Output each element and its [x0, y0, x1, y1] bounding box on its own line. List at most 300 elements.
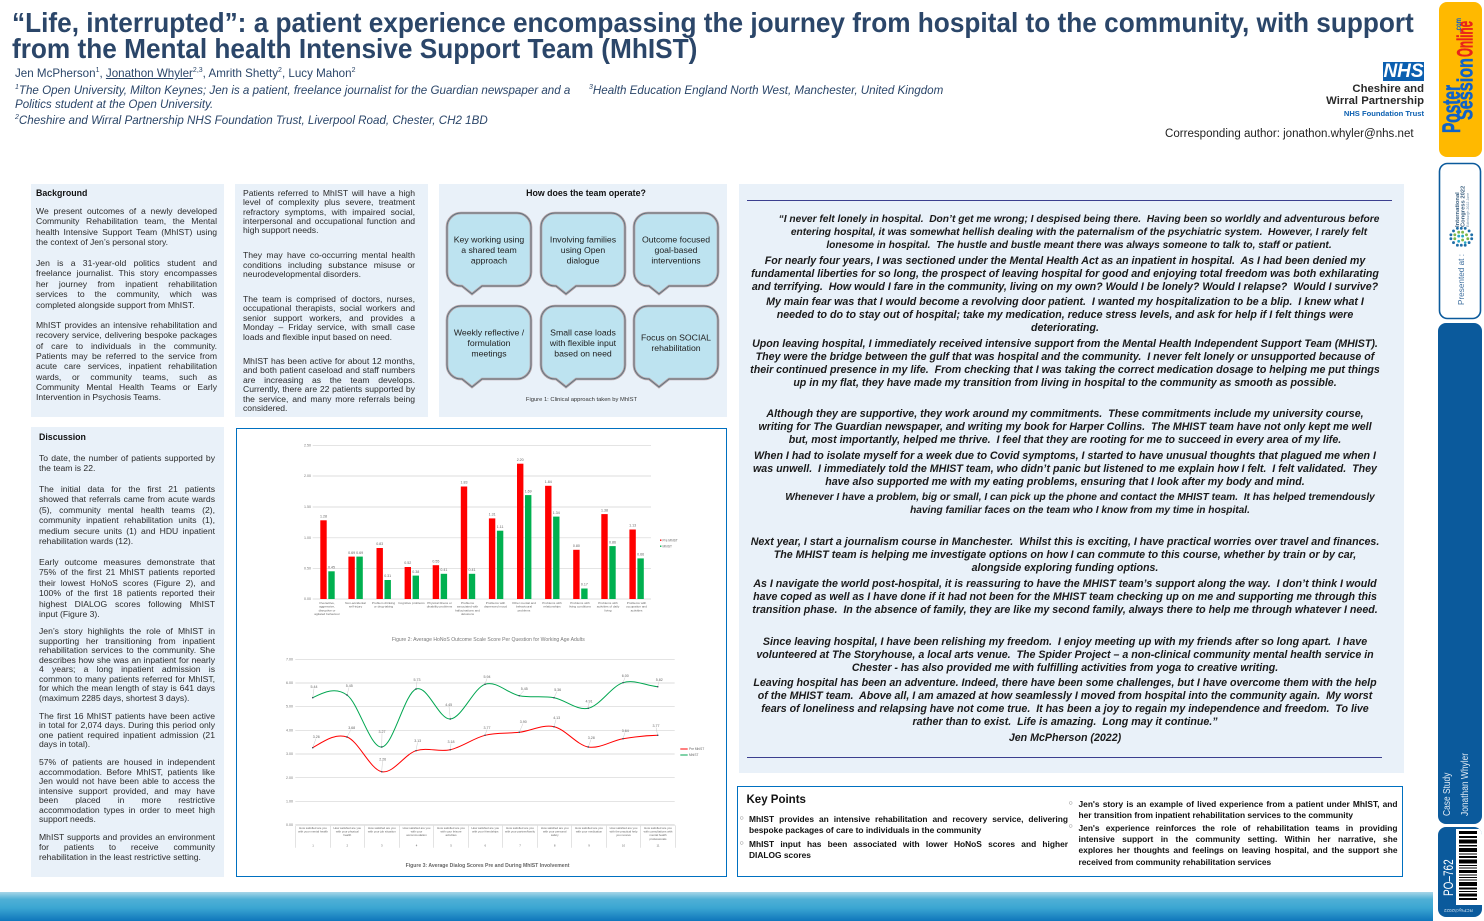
chart: DIALOG line chart: How satisfied are you [333, 826, 362, 830]
chart: HoNoS bar chart: disability problems [427, 605, 453, 609]
discussion text: accommodation types in order to meet high [39, 804, 215, 814]
bubble: weekly reflective: meetings [471, 348, 507, 358]
bubble: key working [447, 213, 531, 294]
referrals text: neurodevelopmental disorders. [243, 269, 361, 279]
discussion text: their lowest HoNoS scores (Figure 2), and [39, 578, 215, 588]
heading: key points: Key Points [746, 794, 806, 806]
quote text: their continued presence in my life. From checking that I was taking the correct medication dosage to helping me put things [750, 364, 1380, 376]
sidebar: presented at: Edinburgh 2022 June [1466, 193, 1470, 227]
chart: HoNoS bar chart: 0.55 [432, 559, 439, 563]
chart: DIALOG line chart: activities [445, 833, 457, 837]
chart: DIALOG line chart: How satisfied are you [437, 826, 465, 830]
chart: DIALOG line chart: 5.45 [521, 687, 528, 691]
discussion text: rehabilitation services to the community. She [39, 645, 215, 655]
discussion text: Early outcome measures demonstrate that [39, 557, 215, 567]
chart: HoNoS bar chart: Physical illness or [427, 601, 452, 605]
chart: DIALOG line chart: 6.00 [286, 681, 293, 685]
discussion text: input (Figure 3). [39, 609, 100, 619]
referrals text: Patients referred to MhIST will have a high [243, 188, 415, 198]
chart: HoNoS bar chart: 0.45 [328, 566, 335, 570]
discussion text: The initial data for the first 21 patients [39, 484, 215, 494]
discussion text: (5), community mental health teams (2), [39, 505, 215, 515]
chart: DIALOG line chart: How satisfied are you [368, 826, 396, 830]
bubble: small case loads [541, 306, 625, 387]
chart: HoNoS bar chart: 0.31 [384, 574, 391, 578]
quote text: Since leaving hospital, I have been relishing my freedom. I enjoy meeting up with my friends after so long apart. I have [763, 636, 1367, 648]
quote text: entering hospital, it was somewhat hellish dealing with the paternalism of the psychiatric system. However, I rarely felt [791, 226, 1367, 238]
chart: DIALOG line chart: How satisfied are you [610, 826, 638, 830]
chart: DIALOG line chart: 5.45 [346, 684, 353, 688]
chart: HoNoS bar chart: 0.17 [581, 583, 588, 587]
panel: charts [236, 428, 727, 877]
chart: HoNoS bar chart: Problem drinking [372, 601, 395, 605]
bubble: social rehabilitation [634, 306, 718, 387]
referrals text: senior support workers, and provides a [243, 313, 415, 323]
referrals text: and both patient caseload and staff numbers [243, 365, 415, 375]
sidebar: poster session online: Session [1452, 58, 1478, 120]
referrals text: They may have co-occurring mental health [243, 250, 415, 260]
chart: DIALOG line chart: 3.90 [520, 720, 527, 724]
chart: DIALOG line chart: 4.13 [553, 716, 560, 720]
bubble: key working: Key working using [454, 234, 524, 244]
key points content: ○ [740, 840, 744, 847]
chart: DIALOG line chart: 4.00 [286, 728, 293, 732]
chart: DIALOG line chart: 2.26 [379, 757, 386, 761]
chart: DIALOG line chart: with consultations with [644, 830, 673, 834]
bubble: key working: a shared team [461, 245, 517, 255]
referrals text: occupational therapists, social workers and [243, 303, 415, 313]
referrals text: interpersonal and occupational function and [243, 216, 415, 226]
bubble: small case loads: with flexible input [549, 338, 617, 348]
discussion text: MhIST supports and provides an environment [39, 832, 215, 842]
discussion text: 100% of the first 18 patients reported their [39, 588, 215, 598]
chart: HoNoS bar chart: 1.69 [525, 489, 532, 493]
discussion text: community inpatient rehabilitation units (1), [39, 515, 215, 525]
quote text: The MHIST team is helping me investigate options on how I can commute to this course, whether by train or by car, [774, 548, 1356, 560]
chart: HoNoS bar chart: Problems with [542, 601, 562, 605]
chart: HoNoS bar chart: 1.28 [320, 514, 327, 518]
referrals text: refractory symptoms, with impaired social, [243, 207, 415, 217]
chart: DIALOG line chart: How satisfied are you [575, 826, 603, 830]
panel: patient quote [739, 184, 1404, 773]
chart: HoNoS bar chart: occupation and [626, 605, 647, 609]
discussion text [39, 453, 215, 862]
panel: referrals [235, 184, 428, 417]
chart: HoNoS bar chart: 0.50 [304, 566, 311, 570]
corresponding author: Corresponding author: jonathon.whyler@nhs.net [1165, 128, 1414, 140]
chart: HoNoS bar chart: 0.66 [637, 553, 644, 557]
chart: HoNoS bar chart: behavioural [516, 605, 532, 609]
discussion text: The first 16 MhIST patients have been active [39, 711, 215, 721]
bubble: small case loads: based on need [554, 348, 612, 358]
chart: DIALOG line chart: 3.13 [414, 739, 421, 743]
key points content: MhIST input has been associated with lower HoNoS scores and higher [749, 839, 1068, 849]
chart: HoNoS bar chart: Overactive, [319, 601, 335, 605]
chart: HoNoS bar chart: 1.84 [545, 480, 552, 484]
chart: DIALOG line chart: 4.45 [445, 703, 452, 707]
chart: HoNoS bar chart: Problems [461, 601, 474, 605]
key points content: explores her thoughts and feelings on leaving hospital, and the support she [1078, 845, 1398, 855]
chart: DIALOG line chart: health [343, 833, 352, 837]
chart: DIALOG line chart: with your job situation [368, 830, 396, 834]
quote text: transition phase. In the absence of family, they are like my second family, always there to help me through whatever I need. [752, 604, 1378, 616]
discussion text: To date, the number of patients supported by [39, 453, 215, 463]
heading: how does the team operate: How does the team operate? [526, 188, 646, 198]
chart: HoNoS bar chart: 0.00 [304, 597, 311, 601]
sidebar: presented at: International [1455, 192, 1461, 227]
chart: HoNoS bar chart: Cognitive problems [398, 601, 425, 605]
quote text: alongside exploring funding options. [972, 562, 1158, 574]
chart: HoNoS bar chart: delusions [461, 612, 474, 616]
discussion text: one patient required inpatient admission (21 [39, 730, 215, 740]
background text [36, 206, 217, 402]
bubble: social rehabilitation: rehabilitation [651, 343, 701, 353]
chart: HoNoS bar chart: 1.34 [553, 511, 560, 515]
chart: DIALOG line chart: 2.00 [286, 776, 293, 780]
discussion text: days in total). [39, 739, 90, 749]
chart: HoNoS bar chart: 2.00 [304, 474, 311, 478]
chart: DIALOG line chart: 3.64 [622, 729, 629, 733]
background text: Community Rehabilitation team, the Mental [36, 216, 217, 226]
key points content: received from community rehabilitation services [1078, 857, 1271, 867]
chart: HoNoS bar chart: hallucinations and [455, 608, 480, 612]
NHS logo: NHS Foundation Trust [1344, 109, 1424, 118]
quote text: As I navigate the world post-hospital, it is reassuring to have the MHIST team’s support along the way. I don’t think I would [753, 578, 1377, 590]
discussion text: 4 years; a long inpatient admission is [39, 664, 215, 674]
background text: wards, or community teams, such as [36, 372, 217, 382]
heading: background: Background [36, 188, 87, 198]
chart: DIALOG line chart: 3.27 [378, 730, 386, 734]
discussion text: 57% of patients are housed in independent [39, 757, 215, 767]
chart: HoNoS bar chart: Problems with [627, 601, 646, 605]
chart: HoNoS bar chart: associated with [457, 605, 478, 609]
bubble: key working: approach [471, 256, 507, 266]
chart: DIALOG line chart: 5.36 [554, 688, 561, 692]
chart: DIALOG line chart: 4 [416, 844, 418, 848]
chart: DIALOG line chart: with your physical [336, 830, 359, 834]
referrals text: Currently, there are 22 patients supported by [243, 384, 415, 394]
bubble: outcome focused: interventions [651, 256, 701, 266]
referrals text: the service, and many more referrals being [243, 394, 415, 404]
quote text: For nearly four years, I was sectioned under the Mental Health Act as an inpatient in hospital. As I had been denied my [765, 254, 1365, 266]
chart: DIALOG line chart: you receive [616, 833, 631, 837]
chart: HoNoS bar chart: 0.86 [609, 540, 616, 544]
key points content: ○ [1068, 823, 1073, 830]
discussion text: accommodation. Before MhIST, patients like [39, 766, 215, 776]
chart: DIALOG line chart: 8 [554, 844, 556, 848]
quote text: but, most importantly, helped me thrive. I feel that they are rooting for me to succeed in every area of my life. [789, 434, 1341, 446]
chart: DIALOG line chart: 5.00 [286, 704, 293, 708]
quote text: have also supported me with my eating problems, ensuring that I look after my body and mind. [825, 476, 1305, 488]
chart: DIALOG line chart: How satisfied are you [471, 826, 500, 830]
discussion text: rehabilitation in the least restrictive setting. [39, 852, 201, 862]
key points content: bespoke packages of care to individuals in the community [749, 825, 981, 835]
referrals text: The team is comprised of doctors, nurses, [243, 294, 415, 304]
chart: HoNoS bar chart: living [604, 608, 612, 612]
referrals text: high support needs. [243, 225, 318, 235]
quote text: of the MHIST team. Above all, I am amazed at how seamlessly I moved from hospital into the community again. My worst [758, 690, 1372, 702]
quote text: was unwell. I immediately told the MHIST team, who didn’t panic but listened to me explain how I felt. I felt validated. They [753, 462, 1377, 474]
panel: key points [737, 786, 1403, 877]
chart: DIALOG line chart: 0.00 [286, 823, 293, 827]
key points content: Jen's story is an example of lived experience from a patient under MhIST, and [1078, 799, 1398, 809]
background text: services to the community, which was [36, 289, 217, 299]
panel: background [31, 184, 224, 417]
background text: Intervention in Psychosis Teams. [36, 392, 161, 402]
quote text: Upon leaving hospital, I immediately received intensive support from the Mental Health Independent Support Team (MHIST). [752, 338, 1378, 350]
chart: DIALOG line chart: 3.00 [286, 752, 293, 756]
NHS logo: Wirral Partnership [1326, 95, 1424, 107]
referrals text: Monday – Friday service, with small case [243, 322, 415, 332]
bubble: involving families: dialogue [567, 256, 600, 266]
referrals text: conditions including substance misuse or [243, 260, 415, 270]
sidebar: poster number and barcode: PO–762 [1441, 859, 1456, 896]
chart: DIALOG line chart: professionals [649, 837, 667, 841]
discussion text: Jen’s story highlights the role of MhIST in [39, 626, 215, 636]
chart: DIALOG line chart: 9 [588, 844, 590, 848]
authors: Jen McPherson1, Jonathon Whyler2,3, Amrith Shetty2, Lucy Mahon2 [15, 67, 355, 80]
discussion text: the team is 22. [39, 463, 95, 473]
quote text: rather than to exist. Life is amazing. Long may it continue.” [912, 716, 1218, 728]
chart: DIALOG line chart: How satisfied are you [644, 826, 672, 830]
chart: DIALOG line chart: 5.94 [484, 675, 490, 679]
quote text: Whenever I have a problem, big or small, I can pick up the phone and contact the MHIST team. It has helped tremendously [785, 492, 1375, 502]
chart: DIALOG line chart: with your friendships [472, 830, 499, 834]
discussion text: supporting her transitioning from inpatient [39, 636, 215, 646]
chart: DIALOG line chart: 3.68 [348, 726, 355, 730]
chart: DIALOG line chart: 3.77 [484, 726, 490, 730]
chart: HoNoS bar chart: Pre MhIST [662, 538, 678, 542]
bubble: weekly reflective: Weekly reflective / [454, 328, 525, 338]
referrals text: MhIST has been active for about 12 months, [243, 356, 415, 366]
chart: DIALOG line chart: How satisfied are you [506, 826, 534, 830]
chart: HoNoS bar chart: 1.13 [629, 524, 636, 528]
background text: MhIST provides an intensive rehabilitation and [36, 320, 217, 330]
background text: the context of Jen’s personal story. [36, 237, 168, 247]
discussion text: intensive support provided, and may have [39, 786, 215, 796]
quote text: deteriorating. [1031, 322, 1099, 334]
discussion text: showed that referrals came from acute wards [39, 494, 215, 504]
figure 1 caption: Figure 1: Clinical approach taken by MhIST [526, 397, 638, 403]
NHS logo: NHS [1383, 61, 1424, 82]
discussion text: in total for 2,074 days. During this period only [39, 720, 215, 730]
chart: DIALOG line chart: 7 [519, 844, 521, 848]
key points content: intensive support in the community setting. Within her narrative, she [1078, 834, 1398, 844]
chart: DIALOG line chart: 3.26 [313, 735, 320, 739]
chart: DIALOG line chart: mental health [649, 833, 667, 837]
chart: DIALOG line chart: 5.82 [656, 678, 663, 682]
affiliation 1: Politics student at the Open University. [15, 98, 213, 111]
quote text: have coped as well as I have done if it had not been for the MHIST team checking up on me and supporting me through this [753, 590, 1377, 602]
NHS logo [1326, 61, 1424, 118]
chart: DIALOG line chart: Figure 3: Average Dialog Scores Pre and During MhIST Involvement [406, 863, 570, 869]
quote text: and terrifying. How would I fare in the community, living on my own? Would I be lonely? Would I relapse? Would I survive? [752, 280, 1378, 292]
title: from the Mental health Intensive Support Team (MhIST) [12, 32, 697, 64]
quote text: Chester - has also provided me with fulfilling activities from yoga to creative writing. [852, 662, 1278, 674]
affiliation 3: 3Health Education England North West, Manchester, United Kingdom [589, 84, 943, 97]
sidebar: case study [1438, 323, 1482, 824]
background text: freelance journalist. This story encompasses [36, 268, 217, 278]
background text: acute care services, inpatient rehabilitation [36, 361, 217, 371]
chart: DIALOG line chart: How satisfied are you [299, 826, 327, 830]
bottom banner [0, 892, 1433, 921]
discussion text: support needs. [39, 814, 96, 824]
affiliation 1: 1The Open University, Milton Keynes; Jen is a patient, freelance journalist for the Guardian newspaper and a [15, 84, 570, 97]
affiliation 2: 2Cheshire and Wirral Partnership NHS Foundation Trust, Liverpool Road, Chester, CH2 1BD [15, 114, 488, 127]
quote text: When I had to isolate myself for a week due to Covid symptoms, I started to have unusual thoughts that plagued me when I [754, 450, 1376, 462]
chart: DIALOG line chart: MhIST [689, 753, 698, 757]
quote text: writing for The Guardian newspaper, and writing my book for Harper Collins. The MHIST team have not only kept me well [758, 420, 1372, 432]
quote text: They were the bridge between the gulf that was hospital and the community. I never felt lonely or unsupported because of [756, 350, 1374, 362]
quote text: volunteered at The Storyhouse, a local arts venue. The Spider Project – a non-clinical community mental health service in [756, 648, 1374, 660]
chart: HoNoS bar chart: 1.83 [460, 481, 468, 485]
referrals text: are increasing as the team develops. [243, 375, 415, 385]
key points content: MhIST provides an intensive rehabilitation and recovery service, delivering [749, 814, 1068, 824]
bubble: outcome focused [634, 213, 718, 294]
chart: HoNoS bar chart: self-injury [349, 605, 363, 609]
chart: DIALOG line chart: 6 [484, 844, 486, 848]
chart: HoNoS bar chart: Other mental and [512, 601, 536, 605]
chart: HoNoS bar chart: Problems with [598, 601, 618, 605]
quote text: Next year, I start a journalism course in Manchester. Whilst this is exciting, I have practical worries over travel and finances. [751, 536, 1379, 548]
sidebar: poster number and barcode [1438, 827, 1482, 917]
chart: DIALOG line chart: 3.28 [588, 736, 595, 740]
discussion text: (maximum 2285 days, shortest 3 days). [39, 692, 189, 702]
sidebar: poster session online: Poster [1438, 85, 1466, 133]
chart: DIALOG line chart: 3 [381, 844, 383, 848]
quote text: having familiar faces on the team who I know from my time in hospital. [910, 504, 1250, 516]
sidebar: presented at: Presented at : [1457, 254, 1466, 305]
chart: HoNoS bar chart: 1.31 [489, 513, 496, 517]
background text: her journey from inpatient rehabilitation [36, 279, 217, 289]
chart: DIALOG line chart: safety [551, 833, 559, 837]
chart: DIALOG line chart: How satisfied are you [403, 826, 431, 830]
chart: HoNoS bar chart: activities of daily [597, 605, 620, 609]
key points content: her transition from inpatient rehabilitation services to the community [1078, 810, 1353, 820]
sidebar: case study: Case Study [1441, 773, 1453, 816]
background text: Jen is a 31-year-old politics student and [36, 258, 217, 268]
chart: HoNoS bar chart: or drug-taking [374, 605, 393, 609]
chart: DIALOG line chart: Pre MhIST [689, 747, 704, 751]
background text: We present outcomes of a newly developed [36, 206, 217, 216]
referrals text: level of complexity plus severe, treatment [243, 197, 415, 207]
chart: DIALOG line chart: 3.18 [448, 740, 454, 744]
sidebar: case study: Jonathan Whyler [1459, 753, 1471, 816]
quote text: Jen McPherson (2022) [1009, 732, 1121, 744]
chart: HoNoS bar chart: 1.11 [497, 525, 503, 529]
chart: HoNoS bar chart: 0.69 [348, 551, 355, 555]
quote text: fears of loneliness and relapsing have not come true. It has been a joy to regain my independence and freedom. To live [761, 702, 1369, 714]
chart: DIALOG line chart: 1 [312, 844, 314, 848]
quote text: Although they are supportive, they work around my commitments. These commitments include my university course, [766, 408, 1364, 420]
chart: HoNoS bar chart: 1.50 [304, 505, 311, 509]
chart: HoNoS bar chart: 2.20 [517, 458, 524, 462]
chart: DIALOG line chart: 4.91 [586, 699, 592, 703]
NHS logo: Cheshire and [1352, 83, 1424, 95]
chart: DIALOG line chart: with your partner/family [505, 830, 535, 834]
quote text: “I never felt lonely in hospital. Don’t get me wrong; I despised being there. Having been so worldly and adventurous before [779, 214, 1379, 224]
chart: HoNoS bar chart: Problems with [570, 601, 590, 605]
title [12, 7, 1414, 64]
quote text: lonesome in hospital. The hustle and bustle meant there was always someone to talk to, staff or patient. [826, 240, 1332, 250]
bubble: weekly reflective [447, 306, 531, 387]
chart: HoNoS bar chart: 2.50 [304, 444, 311, 448]
discussion text: 75% of the first 21 MhIST patients reported [39, 567, 215, 577]
chart: HoNoS bar chart: 0.52 [404, 561, 411, 565]
bubble: outcome focused: Outcome focused [642, 234, 710, 244]
chart: HoNoS bar chart: 0.69 [356, 551, 363, 555]
discussion text: highest DIALOG scores following MhIST [39, 599, 215, 609]
chart: DIALOG line chart: with your [411, 830, 422, 834]
sidebar: poster session online: .com [1454, 18, 1463, 32]
key points content [740, 794, 1398, 867]
background text: health Intensive Support Team (MhIST) using [36, 227, 217, 237]
chart: HoNoS bar chart: 1.00 [304, 536, 311, 540]
discussion text: for which the mean length of stay is 641 days [39, 683, 215, 693]
key points content: ○ [1068, 800, 1073, 807]
chart: DIALOG line chart: with your medication [576, 830, 603, 834]
chart: HoNoS bar chart: depressed mood [484, 605, 507, 609]
chart: DIALOG line chart: 11 [656, 844, 660, 848]
chart: DIALOG line chart: How satisfied are you [541, 826, 569, 830]
heading: discussion: Discussion [39, 432, 86, 442]
chart: HoNoS bar chart: 0.80 [573, 544, 580, 548]
bubble: small case loads: Small case loads [550, 328, 616, 338]
bubble: involving families: using Open [561, 245, 605, 255]
panel: how does the team operate [439, 184, 727, 417]
chart: DIALOG line chart: 2 [346, 844, 348, 848]
quote text [750, 214, 1380, 744]
affiliation 1 [15, 84, 570, 111]
bubble: weekly reflective: formulation [468, 338, 511, 348]
chart: HoNoS bar chart: relationships [543, 605, 561, 609]
chart: HoNoS bar chart: Figure 2: Average HoNoS Outcome Scale Score Per Question for Working Age Adults [392, 637, 585, 643]
chart: HoNoS bar chart: aggressive, [319, 605, 335, 609]
chart: DIALOG line chart: 1.00 [286, 800, 293, 804]
quote text: up in my flat, they have made my transition from living in hospital to the community as smooth as possible. [793, 376, 1337, 388]
chart: HoNoS bar chart: 0.38 [412, 570, 419, 574]
key points content: Jen's experience reinforces the role of rehabilitation teams in providing [1078, 823, 1398, 833]
chart: DIALOG line chart: with the practical help [610, 830, 638, 834]
key points content: DIALOG scores [749, 850, 811, 860]
key points content: ○ [740, 815, 744, 822]
chart: DIALOG line chart: 10 [622, 844, 625, 848]
sidebar: poster number and barcode: RCPsych2022 [1444, 908, 1473, 913]
title: “Life, interrupted”: a patient experience encompassing the journey from hospital to the community, with support [12, 7, 1414, 38]
chart: HoNoS bar chart: 0.41 [440, 568, 447, 572]
chart: HoNoS bar chart: living conditions [569, 605, 591, 609]
quote text: needed to do to stay out of hospital; take my medication, reduce stress levels, and ask for help if I felt things were [777, 308, 1353, 320]
chart: HoNoS bar chart: activities [631, 608, 643, 612]
chart: HoNoS bar chart: disruptive or [319, 608, 335, 612]
chart: HoNoS bar chart: 0.41 [468, 568, 476, 572]
chart: DIALOG line chart: with your personal [543, 830, 567, 834]
background text: recovery service, delivering bespoke packages [36, 330, 217, 340]
panel: discussion [31, 427, 224, 877]
bubble: involving families: Involving families [550, 234, 617, 244]
sidebar: presented at [1438, 162, 1482, 320]
chart: DIALOG line chart: accommodation [406, 833, 427, 837]
bubble: involving families [541, 213, 625, 294]
discussion text: been placed in more restrictive [39, 795, 215, 805]
chart: HoNoS bar chart: 1.38 [601, 508, 608, 512]
chart: HoNoS bar chart: agitated behaviour [314, 612, 340, 616]
chart: DIALOG line chart: 3.77 [652, 724, 660, 728]
chart: HoNoS bar chart: Problems with [486, 601, 505, 605]
chart: HoNoS bar chart: 0.83 [376, 542, 383, 546]
discussion text: common to many patients referred for MhIST, [39, 674, 215, 684]
quote text: Leaving hospital has been an adventure. Indeed, there have been some challenges, but I have overcome them with the help [753, 676, 1377, 688]
